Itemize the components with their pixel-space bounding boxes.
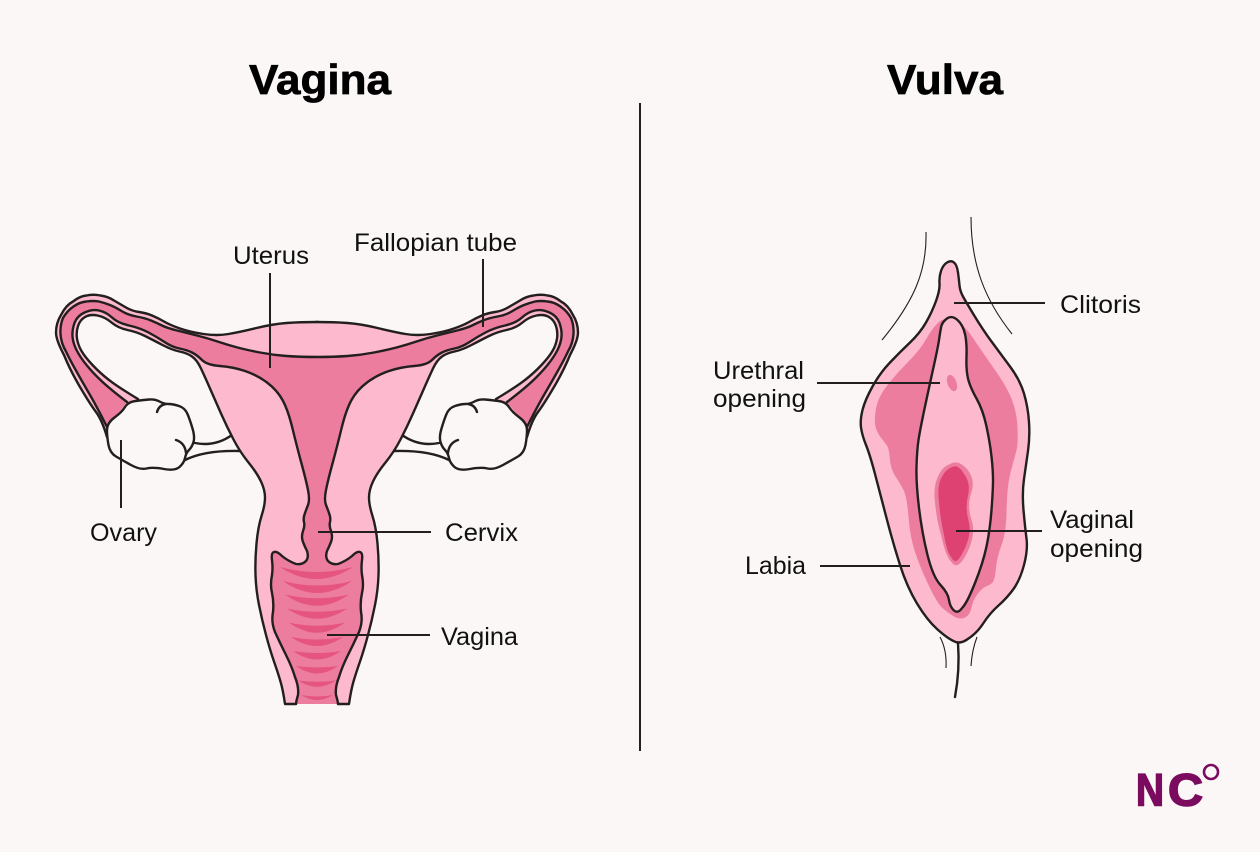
vaginal opening outer [934, 462, 973, 565]
label: Vaginal opening: Vaginal [1050, 506, 1134, 534]
vaginal opening inner [938, 466, 970, 561]
label: Vaginal opening: opening [1050, 535, 1143, 563]
outer labia shape [861, 261, 1029, 643]
ligaments [185, 435, 240, 460]
label: Urethral opening: opening [713, 385, 806, 413]
label: Urethral opening: Urethral [713, 357, 804, 385]
label: Cervix: Cervix [445, 519, 519, 547]
urethral opening [945, 373, 959, 393]
diagram: vulva anatomy [861, 217, 1029, 697]
ovary [107, 399, 194, 470]
vaginal rugae stripes [280, 567, 353, 700]
label: Uterus: Uterus [233, 242, 309, 270]
label: Ovary [90, 440, 157, 547]
central lobe [916, 317, 993, 612]
mid pink cavity and tube band [60, 301, 318, 704]
logo: NC: C [1168, 764, 1203, 816]
diagram: uterus and vagina anatomy [56, 295, 578, 704]
logo: NC: N [1136, 764, 1164, 816]
label: Clitoris: Clitoris [1060, 291, 1141, 319]
center divider [639, 103, 641, 751]
logo: NC [1136, 764, 1218, 816]
title: Vagina: Vagina [249, 56, 392, 103]
light pink body and tube [56, 295, 318, 704]
label: Ovary: Ovary [90, 519, 157, 547]
label: Vaginal opening [956, 506, 1143, 563]
label: Urethral opening [713, 357, 940, 413]
mid pink inner labia area [875, 319, 1018, 619]
left half of reproductive system [56, 295, 318, 704]
label: Vagina: Vagina [441, 623, 518, 651]
anatomical outlines [56, 295, 318, 704]
title: Vulva: Vulva [887, 56, 1004, 103]
label: Fallopian tube: Fallopian tube [354, 229, 517, 257]
right half of reproductive system [316, 295, 578, 704]
label: Labia: Labia [745, 552, 806, 580]
label: Uterus [233, 242, 309, 368]
hair lines [882, 217, 1012, 668]
lower midline [955, 643, 959, 697]
